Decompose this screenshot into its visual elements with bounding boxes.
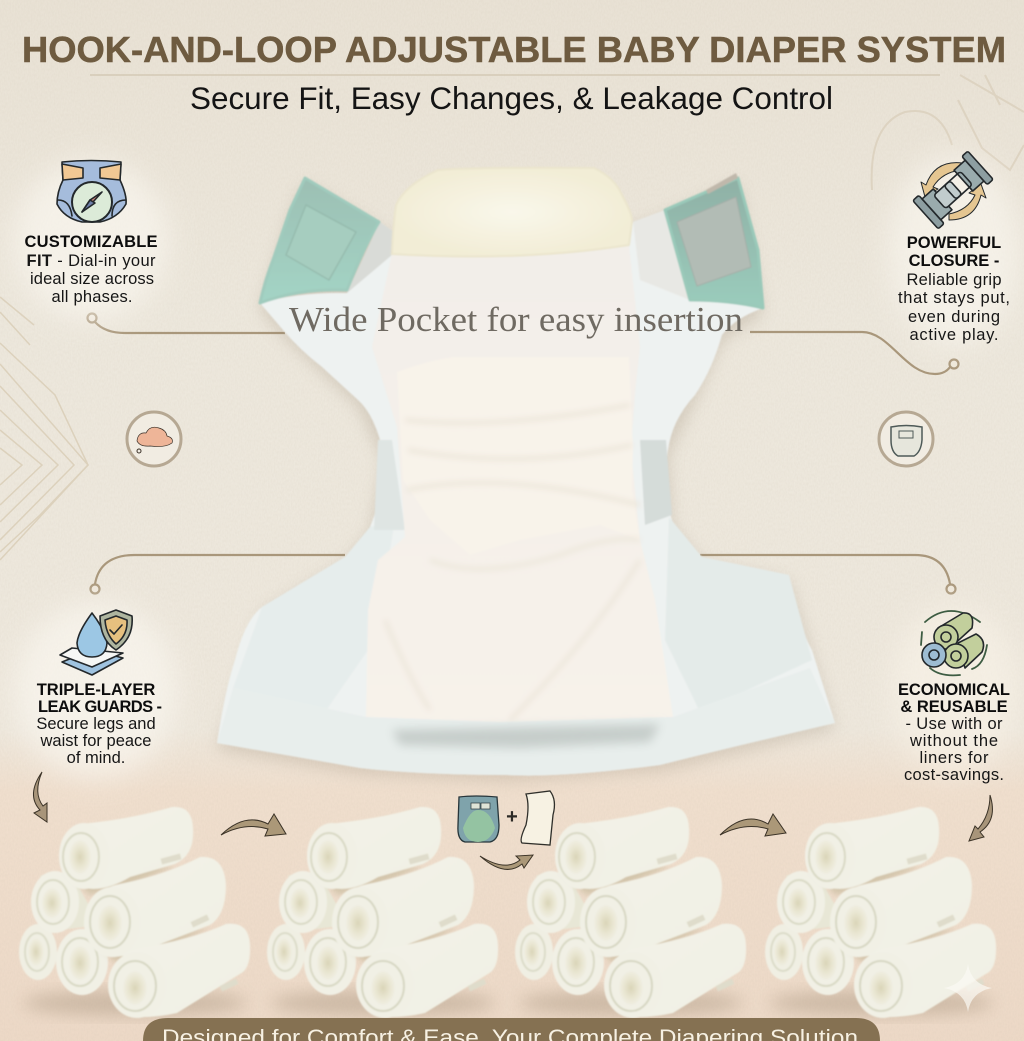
icon: water drop, shield and layers (60, 610, 132, 675)
icon: rolled liners with cycle arrows (921, 611, 987, 675)
icon: diaper plus liner (458, 791, 554, 845)
connector: leak guards (90, 555, 345, 594)
diaper shell (217, 210, 835, 776)
subtitle: Secure Fit, Easy Changes, & Leakage Control (190, 80, 833, 116)
icon: diaper badge (879, 412, 933, 466)
left tab (260, 178, 379, 303)
connector: economical (700, 555, 956, 594)
arrow: down right (969, 795, 992, 841)
sparkle watermark (944, 964, 992, 1012)
title: HOOK-AND-LOOP ADJUSTABLE BABY DIAPER SYSTEM (22, 29, 1006, 70)
text: powerful closure: Reliable grip (906, 271, 1002, 289)
icon: diaper with compass dial (57, 160, 126, 222)
text: triple-layer leak guards: Secure legs and (36, 715, 156, 733)
liner roll stack 1 (19, 807, 250, 1018)
text: customizable fit: all phases. (52, 288, 132, 306)
title divider (90, 74, 940, 76)
text: economical and reusable: cost-savings. (904, 766, 1004, 784)
arrow: stack 1 to 2 (221, 814, 286, 836)
text: powerful closure: active play. (910, 326, 998, 344)
text: economical and reusable: without the (909, 732, 998, 750)
pocket (366, 245, 673, 722)
text: triple-layer leak guards: waist for peace (40, 732, 151, 750)
text: economical and reusable (898, 681, 1010, 784)
connector: powerful closure (750, 332, 958, 374)
decorative top-right line art (872, 75, 1024, 190)
arrow: down left (33, 772, 47, 822)
arrow: under diaper plus liner (480, 855, 533, 869)
feature: triple-layer leak guards (14, 602, 178, 778)
text: triple-layer leak guards: TRIPLE-LAYER (37, 681, 155, 699)
liner roll stack 3 (515, 807, 746, 1018)
text: economical and reusable: & REUSABLE (900, 698, 1008, 716)
text: powerful closure: even during (908, 308, 1000, 326)
pocket opening flap (397, 357, 640, 555)
text: triple-layer leak guards: of mind. (67, 749, 125, 767)
text: powerful closure (898, 234, 1010, 344)
arrow: stack 3 to 4 (720, 814, 786, 836)
text: customizable fit: CUSTOMIZABLE (24, 233, 158, 251)
text: economical and reusable: ECONOMICAL (898, 681, 1010, 699)
feature: economical and reusable (890, 605, 1018, 784)
icon: diaper plus liner: + (506, 806, 518, 828)
text: powerful closure: that stays put, (898, 289, 1010, 307)
right tab (665, 178, 763, 308)
decorative chevron pattern (0, 297, 88, 560)
text: triple-layer leak guards: LEAK GUARDS - (38, 698, 162, 716)
rear waistband (217, 668, 835, 776)
text: triple-layer leak guards (36, 681, 162, 767)
icon: closure buckle with arrows (913, 151, 993, 229)
diaper photo illustration (217, 168, 835, 781)
diaper shadow (217, 184, 835, 781)
text: customizable fit: ideal size across (30, 270, 154, 288)
text: economical and reusable: liners for (920, 749, 989, 767)
soft insert (392, 168, 632, 257)
icon: cloud badge (127, 412, 181, 466)
feature: powerful closure (888, 151, 1020, 345)
connector: customizable fit (88, 314, 285, 333)
feature: customizable fit (13, 160, 169, 320)
liner roll stack 2 (267, 807, 498, 1018)
text: customizable fit (24, 233, 158, 306)
pocket label: Wide Pocket for easy insertion (289, 300, 743, 339)
elastic gathers (374, 440, 405, 530)
liner roll stack 4 (765, 807, 996, 1018)
bottom banner (143, 1018, 880, 1041)
text: economical and reusable: - Use with or (906, 715, 1003, 733)
text: customizable fit: FIT - Dial-in your (26, 252, 156, 270)
text: powerful closure: POWERFUL (907, 234, 1001, 252)
text: powerful closure: CLOSURE - (909, 252, 999, 270)
